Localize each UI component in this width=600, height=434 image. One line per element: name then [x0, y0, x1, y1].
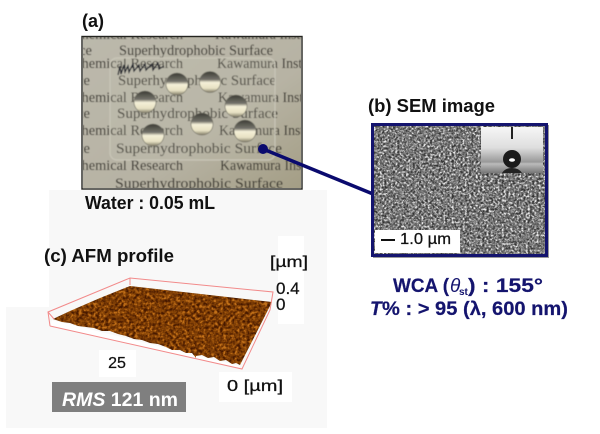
text block: contact angle and transmittance: T [370, 299, 383, 320]
printed background text: Surface [46, 141, 90, 157]
printed background text: Surface [46, 106, 90, 122]
panel: SEM image [372, 124, 549, 258]
axis label: 25: 25 [108, 355, 126, 372]
printed background text: Superhydrophobic Surface [115, 176, 283, 192]
rough surface [50, 284, 274, 368]
printed background text: Chemical Research [72, 27, 184, 43]
printed background text: Chemical Research [72, 90, 184, 106]
printed background text: Kawamura Institute [219, 123, 329, 139]
panel label (b): (b) SEM image [368, 96, 495, 116]
axis label: 0 micrometre: 0 [µm] [227, 378, 283, 395]
panel label (c): (c) AFM profile [44, 246, 174, 266]
text block: contact angle and transmittance: % : > 95 (λ, 600 nm) [382, 299, 568, 320]
text block: contact angle and transmittance: st [459, 287, 469, 298]
panel label (a): (a) [82, 11, 104, 31]
text block: contact angle and transmittance: ) : 155° [468, 276, 543, 297]
printed background text: Kawamura Institute [217, 56, 327, 72]
white strip beneath surface [50, 320, 240, 369]
printed background text: Superhydrophobic Surface [119, 43, 273, 59]
printed background text [83, 37, 301, 188]
printed background text: Kawamura Institute [215, 27, 325, 43]
printed background text: Superhydrophobic Surface [117, 106, 278, 122]
caption: water volume: Water : 0.05 mL [85, 193, 215, 213]
white label patches [99, 236, 304, 402]
text block: contact angle and transmittance [370, 276, 568, 320]
scale bar [375, 230, 460, 253]
axis label: height unit: [µm] [270, 254, 308, 271]
printed background text: Kawamura Institute [220, 158, 330, 174]
panel: photo of water droplets on superhydrophobic glass [83, 37, 301, 188]
printed background text: Superhydrophobic Surface [116, 141, 282, 157]
printed background text: Kawamura Institute [218, 90, 328, 106]
callout: RMS roughness: RMS 121 nm [62, 390, 178, 411]
axis label: 0.4: 0.4 [276, 279, 300, 298]
red bounding frame [48, 278, 273, 369]
photo frame [82, 36, 302, 189]
text block: contact angle and transmittance: θ [450, 276, 461, 297]
axis label: 0: 0 [276, 295, 285, 314]
handwriting on slide [118, 63, 164, 75]
scale bar: 1.0 µm [400, 231, 451, 248]
printed background text: Chemical Research [72, 56, 184, 72]
printed background text: Surface [48, 43, 92, 59]
inset: contact angle droplet [481, 127, 543, 173]
chart: AFM 3D surface [48, 278, 274, 369]
printed background text: Surface [46, 73, 90, 89]
printed background text: Chemical Research [72, 123, 184, 139]
text block: contact angle and transmittance: WCA ( [393, 276, 450, 297]
callout: RMS roughness [52, 382, 186, 412]
water droplets [134, 72, 256, 146]
glass slide [110, 58, 275, 160]
printed background text: Chemical Research [72, 158, 184, 174]
background panel: light grey backdrop [6, 190, 327, 428]
connector line from photo to SEM image [258, 144, 373, 194]
printed background text: Superhydrophobic Surface [118, 73, 276, 89]
